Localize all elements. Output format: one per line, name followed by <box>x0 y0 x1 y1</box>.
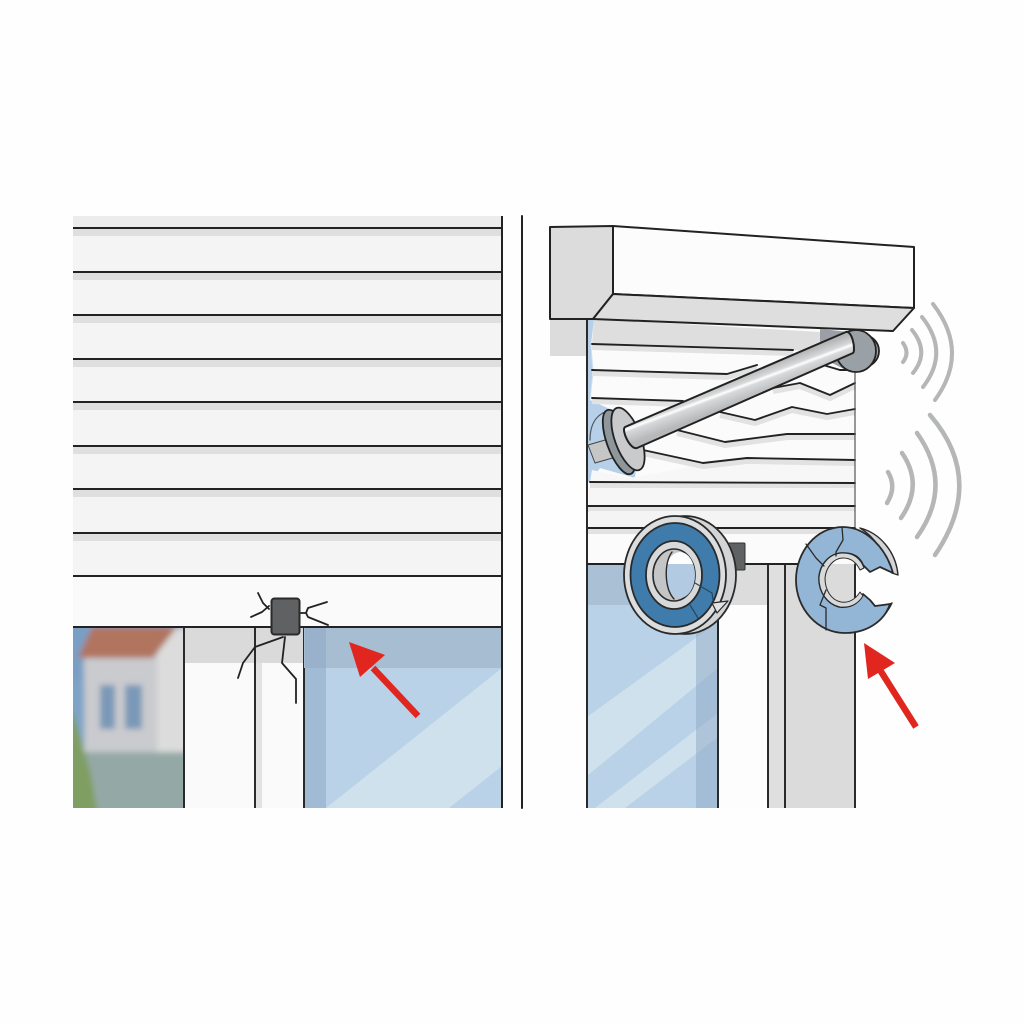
motor stub behind bearing <box>724 543 745 570</box>
panel: right, damaged roller mechanism <box>550 226 959 808</box>
cracked lock block with fractures <box>238 593 328 703</box>
headbox <box>550 226 914 331</box>
window glass, left <box>304 627 503 808</box>
shutter slats <box>73 216 502 576</box>
damaged shutter slats <box>587 319 855 808</box>
blurred house view through the window <box>73 628 183 808</box>
lower window, glass <box>587 564 718 808</box>
divider <box>521 216 523 808</box>
sound waves, lower <box>887 415 959 555</box>
bottom rail <box>73 577 502 627</box>
shattered bushing <box>796 527 898 633</box>
wall block <box>550 319 587 356</box>
bent axle with end plates <box>588 329 879 478</box>
window frame, left <box>184 627 304 808</box>
worn bearing <box>624 516 736 634</box>
arrow: left red pointer <box>349 642 418 716</box>
lower window, frame <box>718 564 855 808</box>
outlines of left panel <box>73 216 502 808</box>
sound waves, upper <box>903 304 952 400</box>
arrow: right red pointer <box>864 643 916 727</box>
panel: left, cracked shutter lock <box>60 216 503 815</box>
